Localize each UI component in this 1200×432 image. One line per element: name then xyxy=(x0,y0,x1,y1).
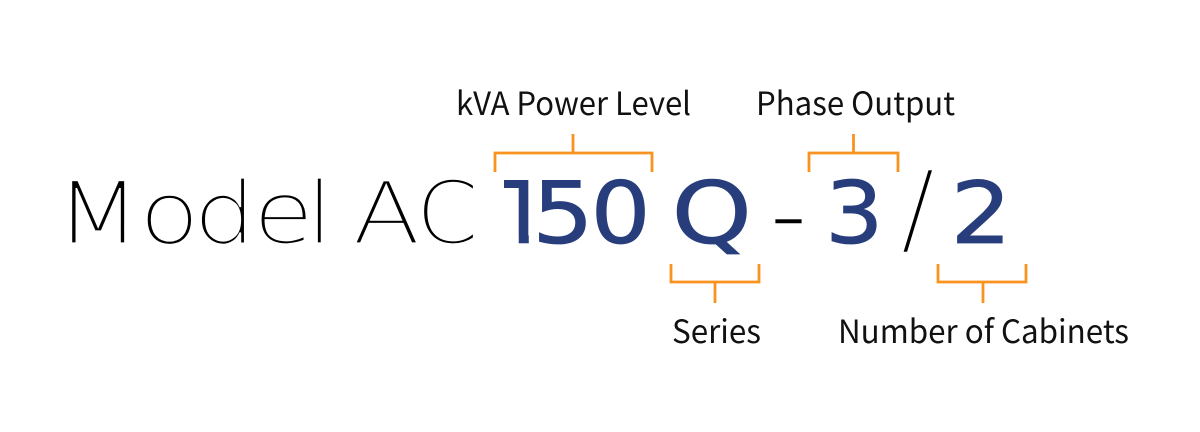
model prefix text: Model A xyxy=(56,163,420,263)
model number: 150: 1 xyxy=(490,163,553,263)
phase digit: 3: 3 xyxy=(825,164,884,264)
label: Series: Series xyxy=(672,307,761,353)
series letter: Q: Q xyxy=(672,164,752,264)
label: kVA Power Level: kVA Power Level xyxy=(456,79,691,125)
model number: 150: 0 xyxy=(590,164,651,264)
cabinet digit: 2: 2 xyxy=(950,163,1012,264)
bracket: number of cabinets xyxy=(938,264,1026,303)
label: Number of Cabinets: Number of Cabinets xyxy=(838,307,1129,353)
slash separator: / xyxy=(901,150,935,267)
model number: 150: 5 xyxy=(532,163,594,264)
label: Phase Output: Phase Output xyxy=(756,79,955,125)
bracket: phase output xyxy=(809,134,898,172)
model prefix text: C xyxy=(416,164,478,264)
model number: 150 xyxy=(504,178,645,244)
bracket: series xyxy=(671,264,759,303)
bracket: kVA power level xyxy=(495,134,652,172)
dash separator: - xyxy=(771,166,806,266)
